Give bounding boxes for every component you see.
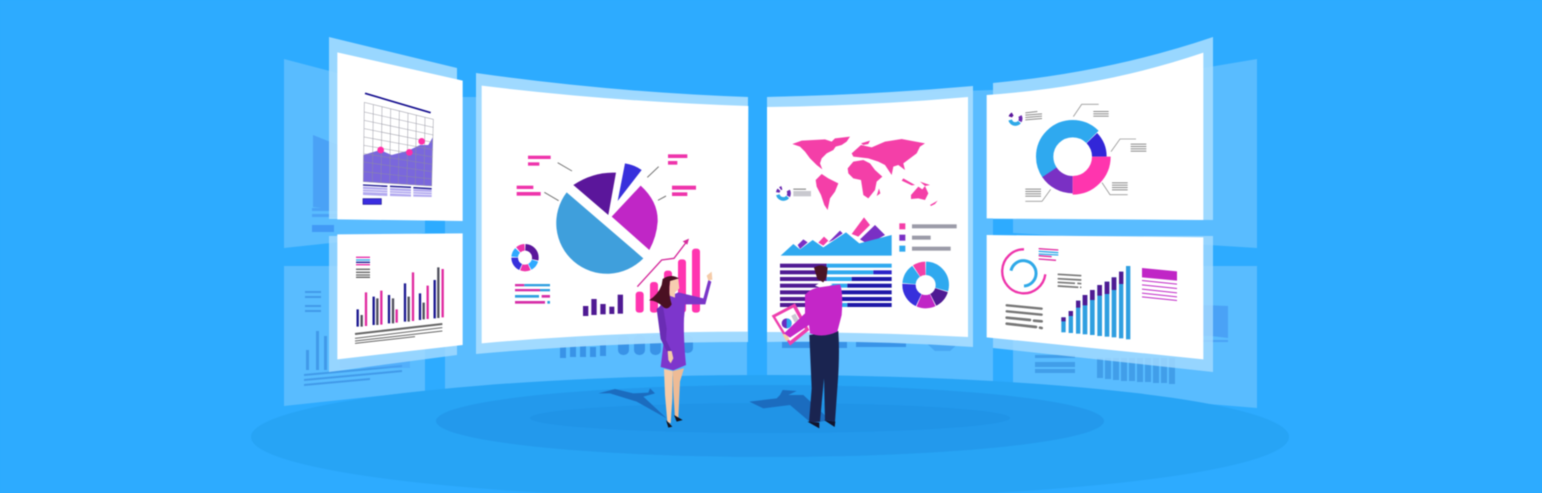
large donut [1044, 128, 1101, 185]
panel: centre-right frame [767, 86, 973, 347]
stacked horizontal bars [780, 264, 892, 307]
thick grey rows [1007, 305, 1042, 328]
panel: centre-left pie chart [482, 86, 748, 343]
ghost charts behind left panels [304, 135, 410, 386]
data points [377, 138, 425, 156]
pink rounded bars [636, 249, 700, 313]
floor ellipse outer [251, 375, 1289, 493]
button [363, 199, 381, 204]
panel: top-right frame [993, 37, 1213, 220]
blue ring [1011, 261, 1036, 286]
floor ellipse middle [436, 385, 1104, 457]
trousers [809, 331, 839, 422]
panel: top-left line chart [337, 52, 463, 221]
hand [783, 333, 789, 341]
pie labels [517, 154, 696, 196]
legs [664, 369, 673, 423]
bars [358, 267, 443, 327]
panel: top-right donut chart [987, 53, 1203, 220]
legend bars [515, 284, 550, 304]
centre-right charts [778, 188, 957, 307]
panel: bottom-right ring and bar chart [987, 235, 1203, 359]
man [772, 265, 842, 428]
world map [792, 137, 938, 210]
trend arrow [637, 239, 689, 287]
shadows [598, 388, 830, 423]
raised arm [678, 280, 711, 304]
mountain area chart [781, 217, 892, 256]
stacked bars [1061, 266, 1130, 339]
magenta label block [1142, 268, 1177, 301]
pie: purple slice [573, 173, 616, 215]
grey label blocks [1025, 111, 1146, 197]
sweater [784, 284, 842, 338]
dress [658, 292, 686, 370]
woman [649, 272, 712, 428]
pie: magenta slice [612, 186, 658, 250]
panel: bottom-left bar chart [337, 233, 463, 359]
raised hand [707, 272, 712, 281]
small donut [1010, 113, 1021, 124]
panel: top-left frame [329, 37, 457, 220]
chart title line [365, 93, 431, 113]
pie: blue half [556, 192, 643, 274]
collar [815, 281, 833, 289]
ghost charts behind right panels [1035, 305, 1228, 384]
large donut [909, 268, 942, 302]
area fill [363, 137, 433, 186]
tablet [772, 303, 809, 346]
leader lines [1025, 104, 1136, 201]
grid [363, 102, 433, 186]
face and neck [669, 279, 679, 298]
lowered arm [657, 304, 672, 352]
caption lines [355, 324, 442, 343]
legend [899, 223, 957, 252]
panel: centre-right white sheet [767, 97, 968, 337]
pink ring [1002, 249, 1045, 293]
legend bars [1039, 249, 1058, 260]
pie: indigo slice [618, 163, 642, 201]
leader lines [544, 163, 666, 201]
panel: bottom-right frame [993, 236, 1213, 372]
shoes [666, 415, 683, 428]
grey lines block [1058, 274, 1081, 287]
back panels [284, 59, 1257, 408]
head [814, 265, 828, 282]
lower hand [668, 351, 673, 363]
panel: centre-left frame [476, 73, 748, 354]
legend lines [356, 257, 370, 277]
small purple bars [583, 295, 623, 316]
small donut [515, 247, 535, 268]
small donut with caption [778, 188, 811, 199]
table under chart [363, 187, 432, 197]
ghost charts behind centre panels [560, 335, 960, 358]
panel: bottom-left frame [329, 234, 457, 372]
floor ellipse inner [530, 403, 1010, 433]
shoes [807, 420, 835, 428]
hair [649, 276, 679, 308]
